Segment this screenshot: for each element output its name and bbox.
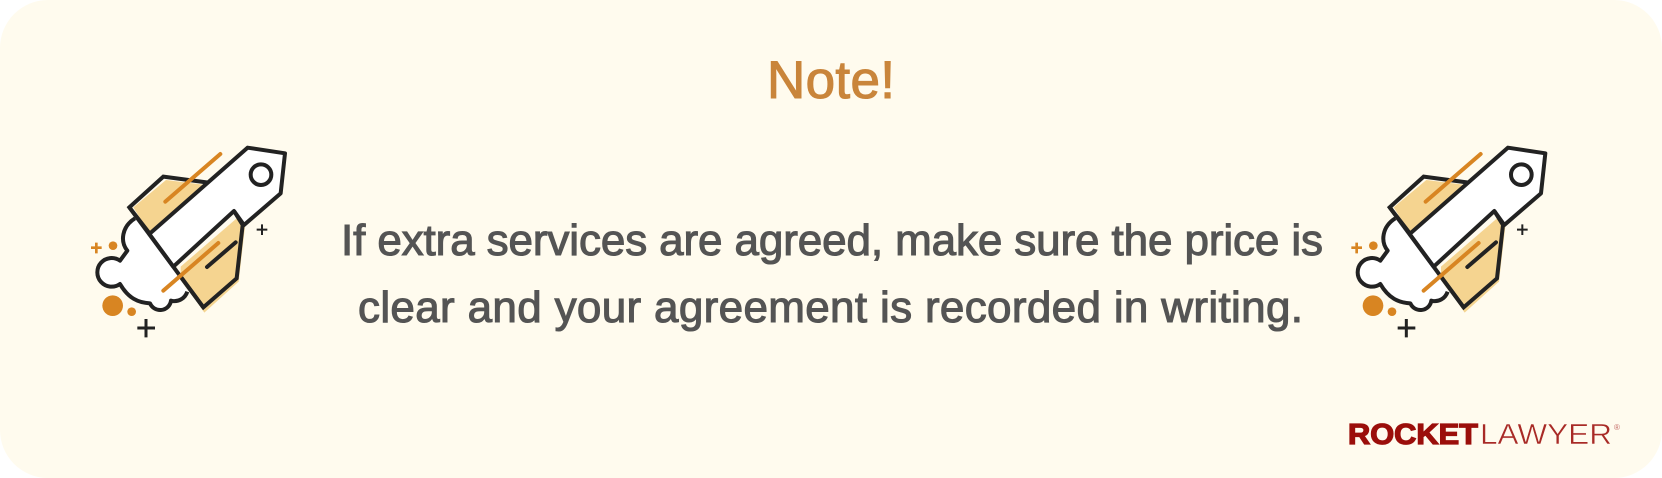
logo: Rocket Lawyer: LAWYER (1480, 419, 1612, 451)
heading: Note!: Note! (767, 51, 895, 110)
text block: note message (341, 216, 1323, 332)
icon: right rocket (1351, 148, 1545, 337)
logo: Rocket Lawyer: ROCKET (1348, 419, 1478, 451)
text block: note message: If extra services are agreed, make sure the price is (341, 216, 1323, 265)
text block: note message: clear and your agreement is recorded in writing. (358, 283, 1303, 332)
icon: left rocket (91, 148, 285, 337)
logo: Rocket Lawyer: ® (1614, 423, 1620, 432)
logo: Rocket Lawyer (1348, 419, 1620, 451)
